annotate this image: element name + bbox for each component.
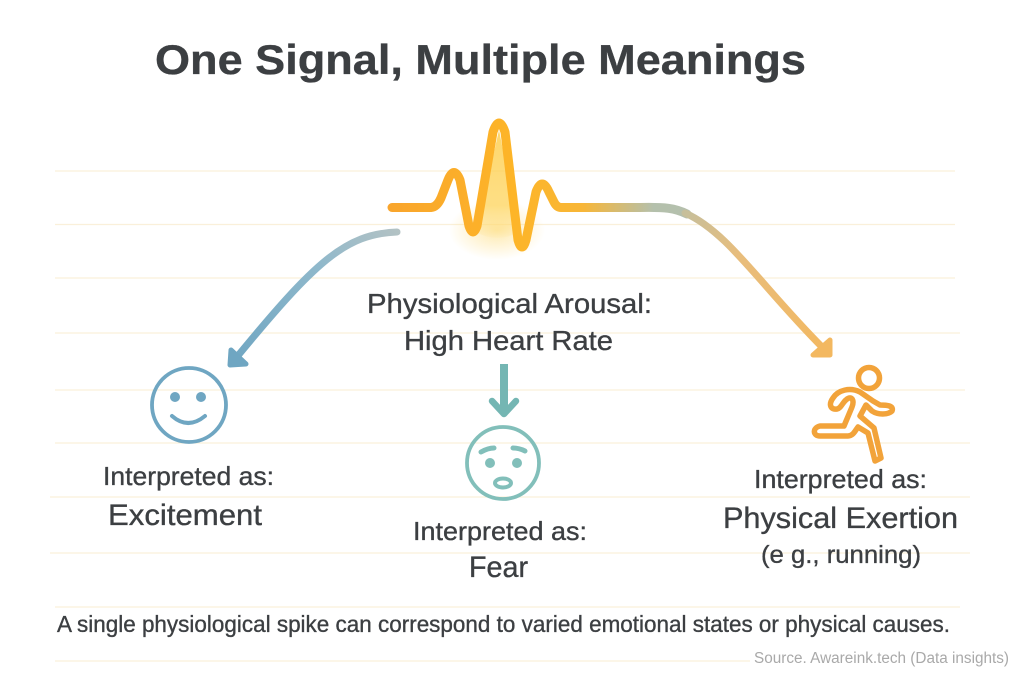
title: One Signal, Multiple Meanings: [155, 36, 806, 83]
arrow: to excitement: [230, 232, 397, 365]
label: excitement: [103, 461, 274, 532]
summary caption: A single physiological spike can correspond to varied emotional states or physical causes.: [57, 611, 950, 637]
label: physical exertion: Physical Exertion: [723, 502, 958, 535]
arrow: to physical exertion: [685, 213, 830, 355]
icon: smiling face: [152, 368, 226, 442]
label: physical exertion: (e g., running): [761, 541, 921, 569]
label: fear: [413, 516, 587, 584]
label: excitement: Interpreted as:: [103, 461, 274, 491]
central label: Physiological Arousal:: [367, 288, 652, 319]
central label: High Heart Rate: [404, 325, 613, 356]
label: fear: Interpreted as:: [413, 516, 587, 546]
label: physical exertion: [723, 464, 958, 569]
arrow: to fear: [492, 364, 516, 414]
source note: Source. Awareink.tech (Data insights): [754, 650, 1009, 667]
central label: [367, 288, 652, 356]
label: excitement: Excitement: [108, 499, 263, 532]
icon: runner: [814, 368, 892, 461]
label: physical exertion: Interpreted as:: [754, 464, 927, 494]
icon: fearful face: [467, 427, 539, 499]
label: fear: Fear: [469, 551, 528, 584]
heart rate pulse signal: [392, 123, 687, 260]
